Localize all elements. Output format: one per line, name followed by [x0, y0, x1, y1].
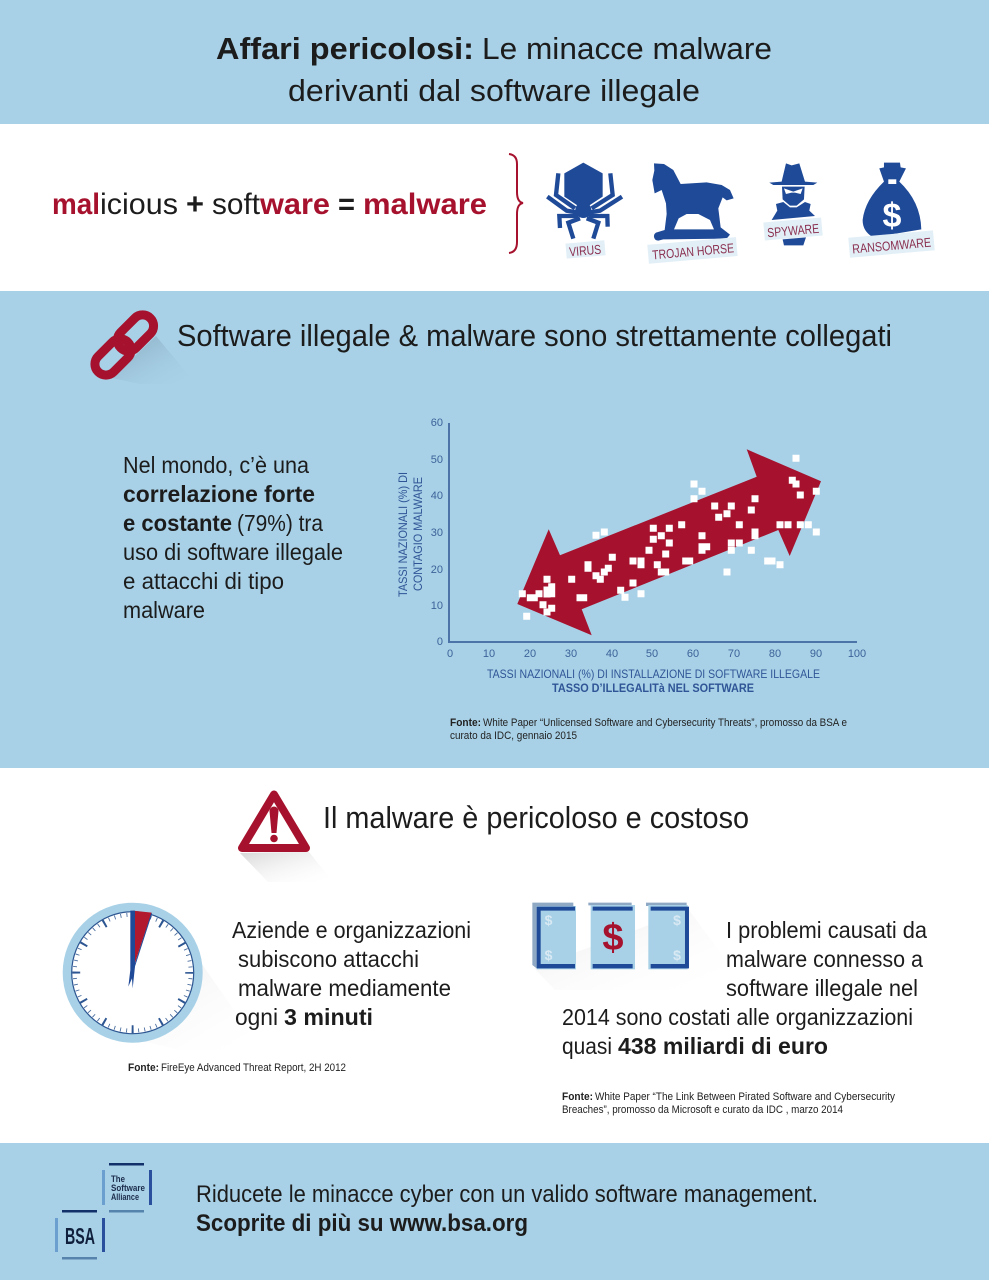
text: cost of malware: 2014 sono costati alle organizzazioni — [562, 1004, 913, 1030]
text: cost of malware: I problemi causati da — [726, 917, 927, 943]
x axis ticks: 0 — [447, 648, 453, 660]
logo: BSA The Software Alliance: BSA — [65, 1223, 95, 1249]
icon: warning triangle — [240, 794, 333, 882]
source note — [450, 717, 847, 742]
icon: banknotes: $ — [602, 917, 624, 959]
y axis ticks: 0 — [437, 636, 443, 648]
title: Le minacce malware — [482, 31, 772, 66]
text: cost of malware: software illegale nel — [726, 975, 918, 1001]
x axis ticks: 100 — [848, 648, 866, 660]
source note: curato da IDC, gennaio 2015 — [450, 730, 577, 742]
source note: Fonte: — [450, 717, 481, 729]
y axis title — [396, 472, 425, 597]
x axis ticks: 80 — [769, 648, 781, 660]
chart axes — [449, 423, 857, 642]
text: attacks every 3 minutes: Aziende e organizzazioni — [232, 917, 471, 943]
correlation text — [123, 452, 343, 623]
correlation text: Nel mondo, c’è una — [123, 452, 309, 478]
x axis title — [487, 667, 820, 695]
y axis ticks: 20 — [431, 564, 443, 576]
icon: banknotes: $ — [545, 912, 553, 928]
call to action: Riducete le minacce cyber con un valido software management. — [196, 1181, 818, 1208]
icon: spyware — [763, 163, 823, 245]
icon: trojan horse: TROJAN HORSE — [652, 240, 735, 262]
x axis ticks: 10 — [483, 648, 495, 660]
y axis ticks: 40 — [431, 490, 443, 502]
equation: malicious + software = malware: malware — [363, 188, 487, 221]
text: attacks every 3 minutes: malware mediamente — [238, 975, 451, 1001]
text: cost of malware: quasi — [562, 1033, 612, 1059]
note right — [646, 903, 689, 969]
note middle — [588, 903, 635, 969]
source note: FireEye Advanced Threat Report, 2H 2012 — [161, 1062, 346, 1074]
x axis ticks: 20 — [524, 648, 536, 660]
text: attacks every 3 minutes — [232, 917, 471, 1030]
y axis ticks: 30 — [431, 527, 443, 539]
source note: White Paper “Unlicensed Software and Cybersecurity Threats”, promosso da BSA e — [483, 717, 847, 729]
equation: malicious + software = malware: + — [186, 188, 204, 221]
y axis ticks: 60 — [431, 417, 443, 429]
equation: malicious + software = malware: = — [338, 188, 355, 221]
x axis ticks: 50 — [646, 648, 658, 660]
y axis ticks — [431, 417, 443, 648]
correlation text: correlazione forte — [123, 481, 315, 507]
x axis ticks: 70 — [728, 648, 740, 660]
source note: Fonte: — [562, 1091, 593, 1103]
equation: malicious + software = malware: soft — [212, 188, 261, 221]
y axis title: TASSI NAZIONALI (%) DI — [396, 472, 410, 597]
icon: virus — [547, 163, 622, 259]
panel: malware pericoloso e costoso — [0, 768, 989, 1143]
x axis ticks: 60 — [687, 648, 699, 660]
source note: Breaches”, promosso da Microsoft e curato da IDC , marzo 2014 — [562, 1104, 843, 1116]
y axis title: CONTAGIO MALWARE — [411, 477, 425, 591]
double trend arrow — [517, 449, 821, 635]
equation: malicious + software = malware: ware — [259, 188, 330, 221]
icon: chain link — [90, 310, 196, 384]
logo: BSA The Software Alliance: Software — [111, 1183, 145, 1193]
section heading: Il malware è pericoloso e costoso — [323, 800, 749, 835]
icon: banknotes — [532, 903, 722, 990]
x axis title: TASSO D’ILLEGALITà NEL SOFTWARE — [552, 681, 754, 695]
text: attacks every 3 minutes: 3 minuti — [284, 1004, 373, 1030]
panel: footer — [0, 1143, 989, 1280]
text: attacks every 3 minutes: subiscono attacchi — [238, 946, 419, 972]
logo: BSA The Software Alliance: Alliance — [111, 1192, 139, 1202]
equation: malicious + software = malware: mal — [52, 188, 100, 221]
source note: Fonte: — [128, 1062, 159, 1074]
data points — [519, 458, 820, 616]
panel: malware definition — [0, 124, 989, 291]
equation: malicious + software = malware: icious — [100, 188, 178, 221]
panel: header — [0, 0, 989, 124]
correlation text: (79%) tra — [237, 510, 323, 536]
section heading: Software illegale & malware sono strettamente collegati — [177, 318, 892, 353]
note left — [532, 903, 576, 969]
source note: White Paper “The Link Between Pirated Software and Cybersecurity — [595, 1091, 895, 1103]
icon: banknotes: $ — [673, 947, 681, 963]
x axis ticks: 40 — [606, 648, 618, 660]
call to action — [196, 1181, 818, 1237]
title: derivanti dal software illegale — [288, 73, 700, 108]
correlation text: malware — [123, 597, 205, 623]
icon: spyware: SPYWARE — [767, 221, 820, 240]
correlation text: uso di software illegale — [123, 539, 343, 565]
icon: virus: VIRUS — [569, 242, 602, 259]
icon: ransomware — [848, 163, 935, 258]
x axis ticks — [447, 648, 866, 660]
text: attacks every 3 minutes: ogni — [235, 1004, 278, 1030]
icon: ransomware: RANSOMWARE — [852, 235, 932, 256]
title: Affari pericolosi: — [216, 31, 474, 66]
text: cost of malware — [562, 917, 927, 1059]
x axis ticks: 30 — [565, 648, 577, 660]
logo: BSA The Software Alliance: The — [111, 1174, 125, 1184]
x axis ticks: 90 — [810, 648, 822, 660]
y axis ticks: 10 — [431, 600, 443, 612]
text: cost of malware: malware connesso a — [726, 946, 923, 972]
curly brace — [509, 154, 523, 253]
logo: BSA The Software Alliance — [55, 1163, 152, 1260]
icon: clock — [63, 903, 262, 1050]
panel: software illegale e malware — [0, 291, 989, 768]
icon: banknotes: $ — [545, 947, 553, 963]
icon: banknotes: $ — [673, 912, 681, 928]
icon: trojan horse — [647, 163, 738, 264]
scatter chart — [396, 417, 866, 695]
x axis title: TASSI NAZIONALI (%) DI INSTALLAZIONE DI SOFTWARE ILLEGALE — [487, 667, 820, 681]
call to action: Scoprite di più su www.bsa.org — [196, 1210, 528, 1237]
y axis ticks: 50 — [431, 454, 443, 466]
correlation text: e attacchi di tipo — [123, 568, 284, 594]
source note — [562, 1091, 895, 1116]
equation: malicious + software = malware — [52, 188, 487, 221]
title — [216, 31, 772, 108]
correlation text: e costante — [123, 510, 232, 536]
text: cost of malware: 438 miliardi di euro — [618, 1033, 828, 1059]
icon: ransomware: $ — [883, 197, 902, 235]
